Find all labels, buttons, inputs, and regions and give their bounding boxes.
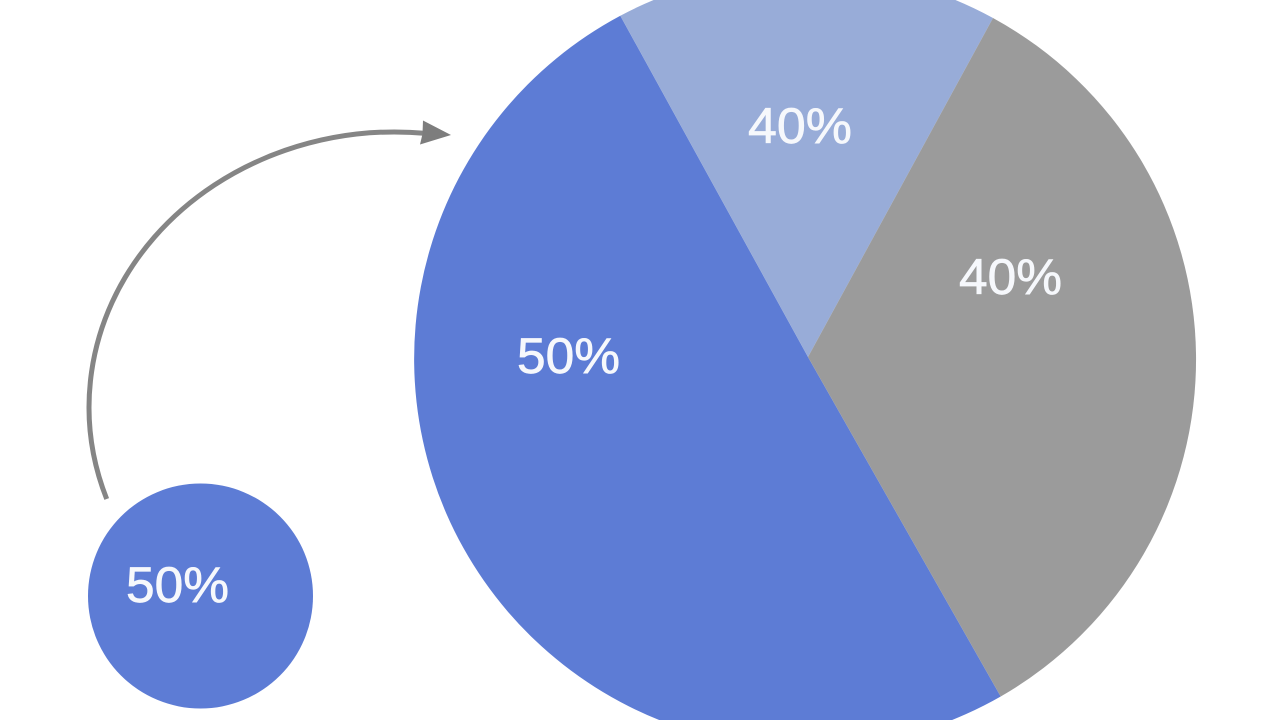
label: small circle 50%: 50% (126, 557, 229, 613)
label: blue segment 50%: 50% (517, 328, 620, 384)
label: light blue segment 40%: 40% (748, 98, 852, 154)
small blue circle with label (88, 484, 313, 708)
pie segment: blue 50% (414, 16, 1001, 720)
large pie chart (414, 0, 1196, 720)
pie segment: light blue 40% (620, 0, 993, 357)
curved arrow from small circle to pie (89, 120, 451, 499)
pie segment: gray 40% (808, 18, 1196, 696)
label: gray segment 40%: 40% (959, 249, 1062, 305)
